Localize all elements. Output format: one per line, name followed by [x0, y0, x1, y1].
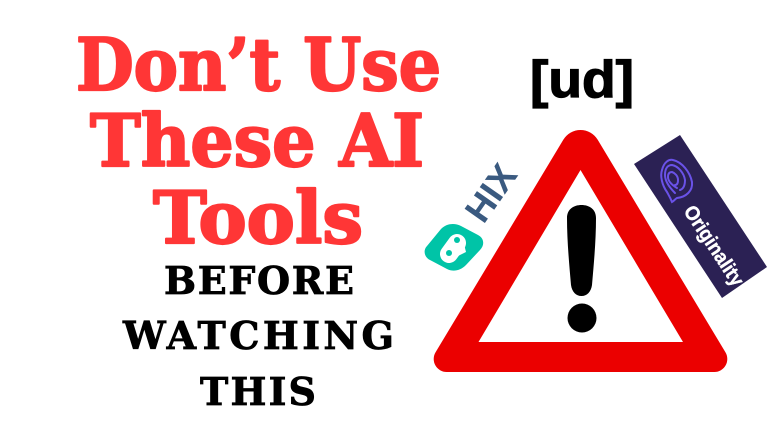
icon: HIX green badge — [425, 224, 483, 271]
icon: exclamation mark — [567, 205, 596, 332]
title: Don't Use These AI Tools: These AI — [90, 98, 424, 183]
logo: HIX — [425, 156, 525, 271]
wordmark: HIX: HIX — [456, 156, 525, 230]
title: Don't Use These AI Tools: Don’t Use — [76, 22, 441, 107]
subtitle: Before Watching This: WATCHING — [122, 313, 394, 358]
title: Don't Use These AI Tools: Tools — [153, 175, 363, 260]
logo: [ud]: [ud] — [530, 51, 634, 109]
subtitle: Before Watching This — [122, 258, 394, 414]
wordmark: Originality: Originality — [679, 202, 748, 291]
panel: Originality banner — [634, 135, 767, 298]
subtitle: Before Watching This: THIS — [200, 369, 316, 414]
icon: Originality spiral — [661, 160, 692, 202]
title: Don't Use These AI Tools — [76, 22, 441, 260]
subtitle: Before Watching This: BEFORE — [164, 258, 354, 303]
logo: Originality — [634, 135, 767, 298]
icon: warning triangle — [434, 130, 727, 372]
